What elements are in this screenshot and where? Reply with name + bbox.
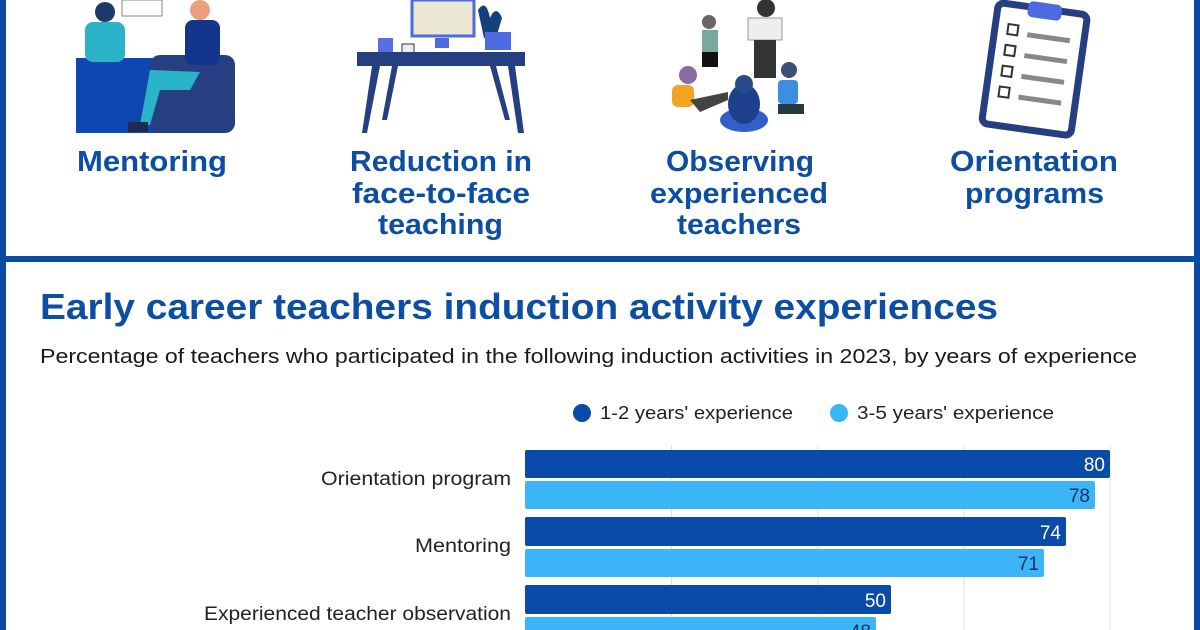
legend: 3-5 years' experience	[857, 403, 1054, 423]
subtitle: Percentage of teachers who participated in the following induction activities in 2023, by years of experience	[40, 346, 1137, 368]
bar chart: Mentoring	[415, 536, 511, 557]
legend	[573, 403, 1054, 423]
legend: 1-2 years' experience	[600, 403, 793, 423]
icon: mentoring	[76, 0, 235, 133]
heading: Observing experienced teachers: teachers	[677, 209, 801, 241]
heading: Orientation programs	[950, 146, 1118, 210]
heading: Mentoring: Mentoring	[77, 146, 227, 178]
heading: Observing experienced teachers: experienced	[650, 178, 828, 210]
heading: Reduction in face-to-face teaching: Reduction in	[350, 146, 532, 178]
heading: Reduction in face-to-face teaching: face-to-face	[352, 178, 530, 210]
heading: Observing experienced teachers	[650, 146, 828, 241]
heading: Orientation programs: programs	[965, 178, 1104, 210]
heading: Reduction in face-to-face teaching: teaching	[378, 209, 503, 241]
heading: Orientation programs: Orientation	[950, 146, 1118, 178]
icon: clipboard	[982, 0, 1088, 136]
icon: observing teachers	[672, 0, 804, 132]
bar chart: 78	[1069, 486, 1090, 507]
bar chart	[204, 445, 1110, 630]
chart title: Early career teachers induction activity experiences	[40, 286, 998, 327]
bar chart: Orientation program	[321, 469, 511, 490]
bar chart: Experienced teacher observation	[204, 604, 511, 625]
heading: Reduction in face-to-face teaching	[350, 146, 532, 241]
heading: Observing experienced teachers: Observing	[666, 146, 814, 178]
icon: desk	[357, 0, 525, 133]
bar chart: 74	[1040, 523, 1061, 544]
bar chart: 50	[865, 591, 886, 612]
bar chart: 80	[1084, 455, 1105, 476]
bar chart: 71	[1018, 554, 1039, 575]
